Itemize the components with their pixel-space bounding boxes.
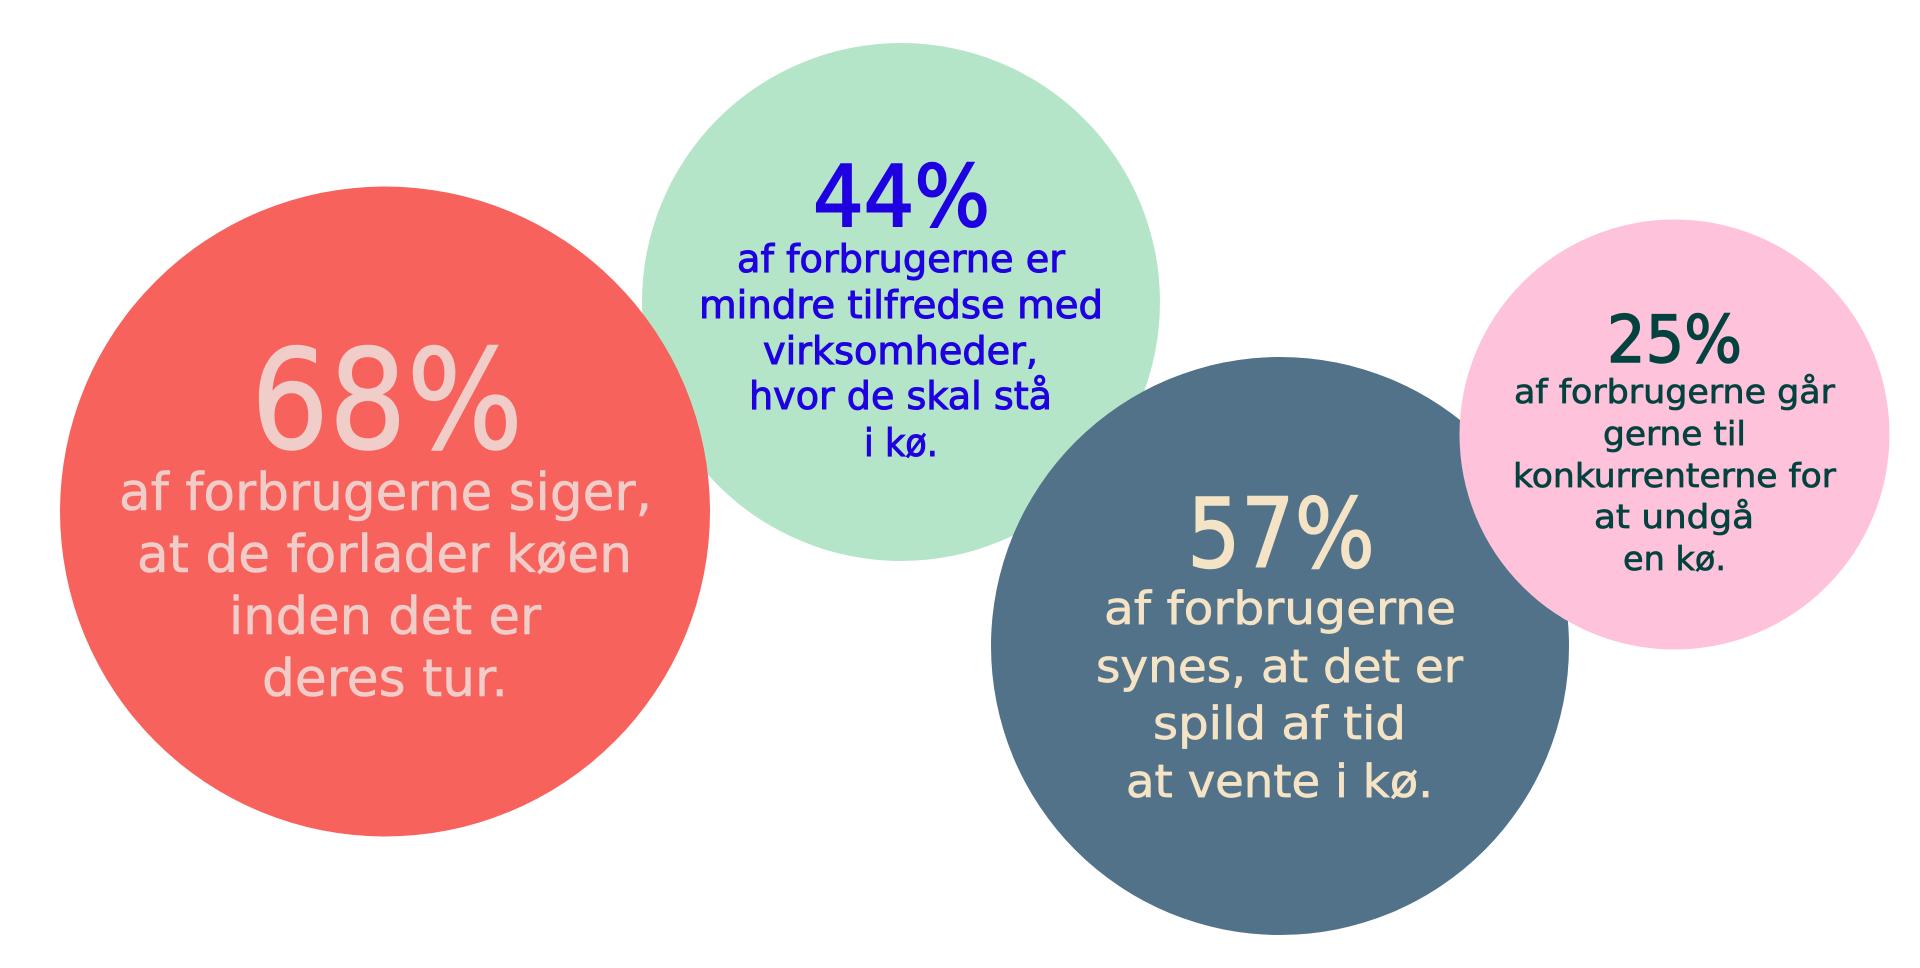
description 68%: at de forlader køen	[137, 525, 632, 585]
description 44%	[699, 237, 1103, 465]
stat text: 44%	[699, 148, 1103, 465]
description 57%: spild af tid	[1153, 697, 1406, 750]
description 44%: mindre tilfredse med	[699, 283, 1103, 327]
description 25%: af forbrugerne går	[1514, 372, 1835, 411]
number 57%: 57%	[1187, 478, 1375, 590]
description 25%: gerne til	[1603, 414, 1746, 453]
description 68%: inden det er	[229, 587, 542, 647]
description 57%: af forbrugerne	[1104, 582, 1456, 635]
description 68%	[119, 463, 652, 709]
description 44%: hvor de skal stå	[749, 374, 1052, 418]
description 57%	[1096, 582, 1464, 808]
panel: 57% blue-grey circle	[991, 357, 1569, 935]
panel: 68% red circle	[60, 186, 710, 836]
stat text: 68%	[119, 320, 652, 709]
description 57%: at vente i kø.	[1126, 755, 1433, 808]
description 25%: konkurrenterne for	[1513, 456, 1836, 495]
description 44%: virksomheder,	[763, 329, 1038, 373]
description 57%: synes, at det er	[1096, 640, 1464, 693]
description 68%: deres tur.	[262, 649, 508, 709]
stat text: 57%	[1096, 478, 1464, 808]
panel: 44% green circle	[642, 43, 1160, 561]
description 25%	[1513, 372, 1836, 578]
red circle background	[60, 186, 710, 836]
description 25%: at undgå	[1594, 497, 1754, 536]
panel: 25% pink circle	[1460, 220, 1890, 650]
description 25%: en kø.	[1623, 539, 1726, 578]
number 68%: 68%	[251, 320, 523, 481]
description 44%: af forbrugerne er	[737, 237, 1065, 281]
number 44%: 44%	[813, 148, 990, 247]
green circle background	[642, 43, 1160, 561]
description 44%: i kø.	[864, 421, 938, 465]
pink circle background	[1460, 220, 1890, 650]
number 25%: 25%	[1607, 303, 1742, 378]
description 68%: af forbrugerne siger,	[119, 463, 652, 523]
stat text: 25%	[1513, 303, 1836, 578]
blue-grey circle background	[991, 357, 1569, 935]
